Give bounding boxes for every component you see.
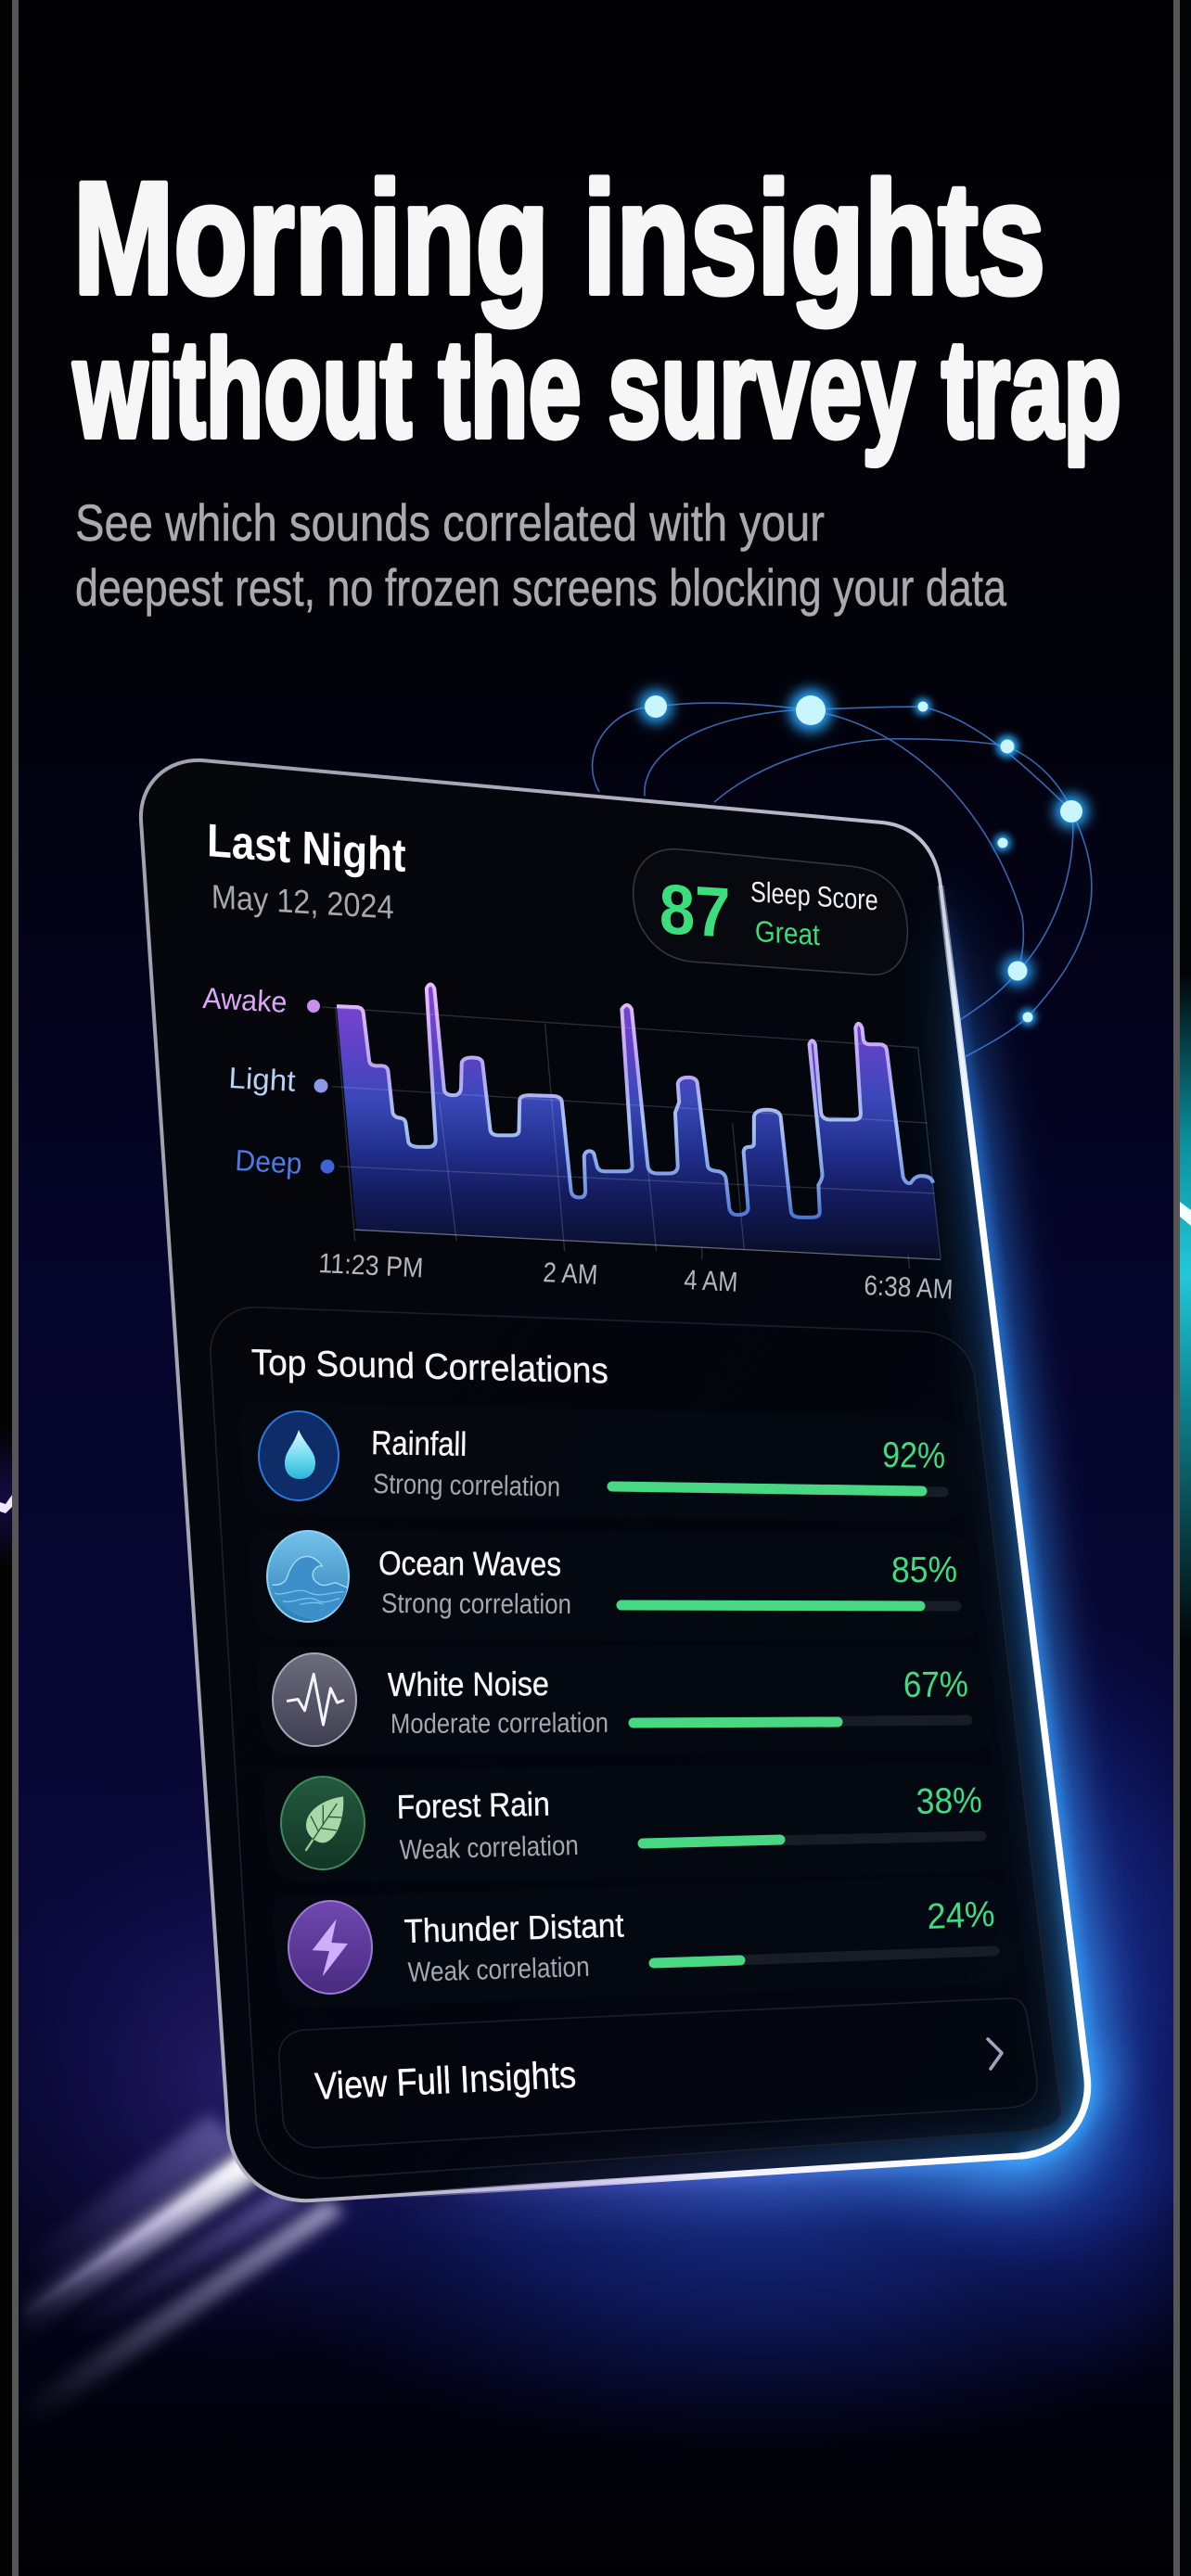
row: rainfall: 92% [882, 1435, 945, 1476]
panel heading: Top Sound Correlations [251, 1343, 608, 1391]
grid lines [323, 1007, 941, 1269]
light streaks bottom left [23, 2114, 345, 2431]
time axis labels [318, 1248, 954, 1306]
row: forest rain: Forest Rain [396, 1785, 550, 1826]
time axis labels: 2 AM [543, 1257, 598, 1291]
phone card [141, 760, 1088, 2200]
header: last night: Last Night [207, 814, 406, 882]
icon: chevron [988, 2039, 1002, 2069]
icon: ocean wave [267, 1531, 349, 1622]
card bezel [141, 760, 1088, 2200]
time axis labels: 6:38 AM [864, 1270, 954, 1306]
stepped area plot [323, 984, 941, 1269]
stage labels: Awake [202, 981, 288, 1019]
icon: leaf [281, 1777, 365, 1869]
row: ocean waves: 85% [891, 1550, 957, 1590]
panel: top sound correlations [211, 1307, 1060, 2178]
bar 24% [654, 1951, 994, 1963]
panel outline [211, 1307, 1060, 2178]
row: thunder distant: Weak correlation [407, 1952, 590, 1988]
bright bottom edge [390, 2156, 1020, 2196]
row: rainfall [239, 1402, 968, 1521]
icon: waveform [273, 1653, 356, 1746]
row: rainfall: Rainfall [371, 1423, 467, 1463]
sleep score pill: Sleep Score [750, 875, 878, 917]
bar 38% [643, 1836, 981, 1843]
subtitle: See which sounds correlated with your [75, 493, 825, 552]
stage labels: Deep [235, 1143, 302, 1180]
row: white noise: Moderate correlation [391, 1708, 608, 1740]
sleep score pill [634, 849, 907, 975]
row: forest rain [263, 1762, 1009, 1882]
orbit lines [593, 703, 1092, 1057]
stage labels [202, 981, 334, 1180]
stage labels: Light [228, 1061, 297, 1098]
sleep score pill: 87 [659, 870, 731, 953]
header: last night [207, 814, 406, 926]
row: white noise: 67% [903, 1664, 968, 1705]
header: last night: May 12, 2024 [211, 877, 394, 926]
row: rainfall: Strong correlation [373, 1469, 560, 1503]
icon: lightning bolt [288, 1901, 372, 1994]
bar 85% [621, 1605, 956, 1606]
inner edge glow [464, 886, 1088, 2191]
card outer glow [390, 886, 1088, 2196]
card body [141, 760, 1088, 2200]
row: ocean waves: Strong correlation [381, 1588, 571, 1620]
bright right edge [941, 886, 1088, 2156]
row: thunder distant: Thunder Distant [403, 1906, 624, 1950]
row: thunder distant [273, 1877, 1018, 2008]
time axis labels: 4 AM [684, 1265, 738, 1298]
bar 67% [634, 1720, 967, 1723]
row: thunder distant: 24% [927, 1894, 995, 1937]
headline [72, 149, 1121, 466]
sleep score pill: Great [755, 914, 820, 951]
orbit constellation behind card [593, 689, 1092, 1057]
sleep stage chart [202, 981, 954, 1306]
bar 92% [612, 1486, 943, 1492]
subtitle [75, 493, 1007, 617]
row: forest rain: Weak correlation [399, 1830, 579, 1866]
time axis labels: 11:23 PM [318, 1248, 424, 1284]
row: forest rain: 38% [916, 1780, 982, 1822]
icon: water drop [259, 1411, 339, 1500]
row: white noise: White Noise [388, 1664, 549, 1703]
button: view full insights: View Full Insights [314, 2053, 577, 2108]
row: white noise [256, 1645, 991, 1754]
row: ocean waves: Ocean Waves [378, 1544, 561, 1583]
glowing nodes [639, 689, 1088, 1026]
button: view full insights [279, 1998, 1037, 2148]
row: ocean waves [249, 1530, 980, 1641]
